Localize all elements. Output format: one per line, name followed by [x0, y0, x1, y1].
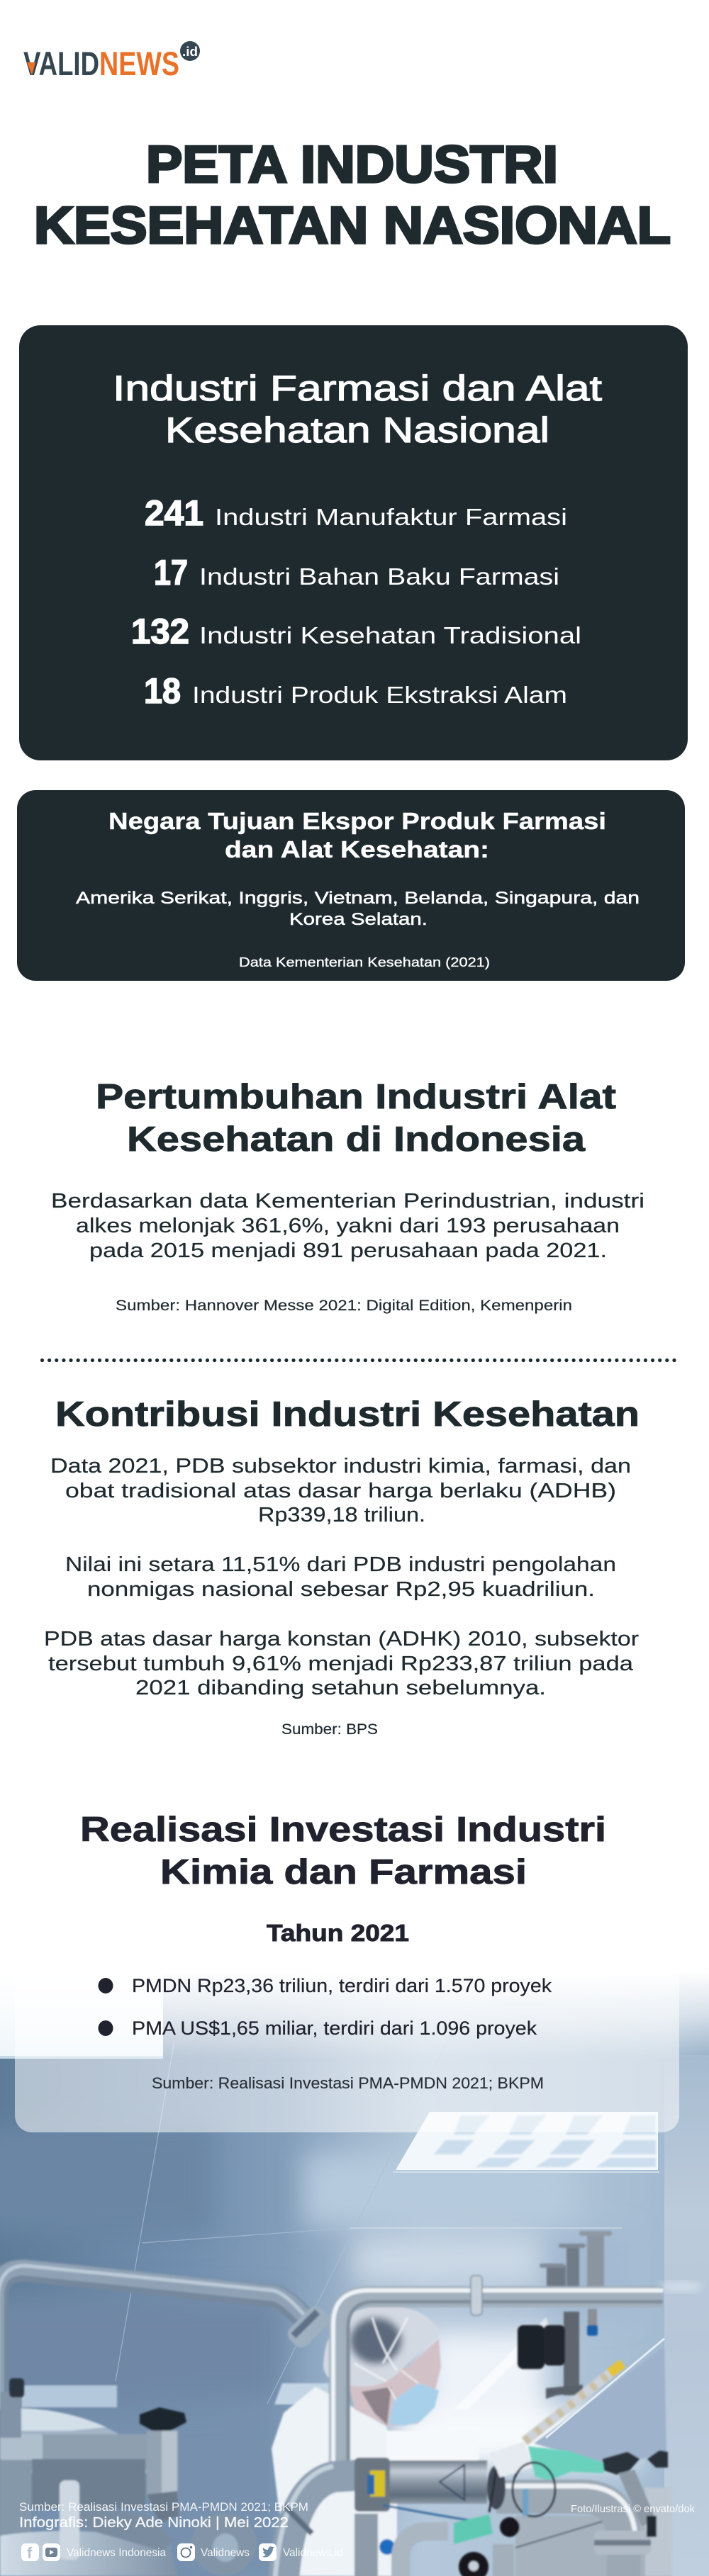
paragraph 3: tersebut tumbuh 9,61% menjadi Rp233,87 triliun pada [48, 1653, 634, 1675]
icon: facebook: f [27, 2544, 33, 2562]
export countries: Amerika Serikat, Inggris, Vietnam, Belanda, Singapura, dan [76, 889, 640, 908]
heading: Kesehatan di Indonesia [127, 1120, 586, 1159]
logo: Validnews.id: .id [182, 45, 198, 59]
diaphragm valve with black knob [518, 2309, 598, 2399]
paragraph 2: nonmigas nasional sebesar Rp2,95 kuadriliun. [87, 1578, 595, 1601]
paragraph 3 [44, 1628, 639, 1699]
source: Sumber: BPS [281, 1721, 378, 1738]
stat: 132: 132 [131, 612, 189, 651]
heading: Realisasi Investasi Industri [80, 1811, 606, 1849]
panel heading: Industri Farmasi dan Alat [113, 369, 602, 408]
glove [528, 2446, 610, 2480]
footer credits: Infografis: Dieky Ade Ninoki | Mei 2022 [19, 2515, 289, 2531]
stat: 18: 18 [144, 671, 181, 711]
export countries [76, 889, 640, 929]
paragraph 3: PDB atas dasar harga konstan (ADHK) 2010, subsektor [44, 1628, 639, 1650]
background photo: cleanroom worker and steel pipes [0, 1980, 709, 2576]
heading: Kontribusi Industri Kesehatan [55, 1395, 640, 1434]
lower arch pipes [354, 2514, 503, 2576]
paragraph 1: Rp339,18 triliun. [258, 1504, 425, 1526]
left pipe [0, 2266, 312, 2409]
stat: 241: 241 [145, 493, 203, 533]
icon: youtube [43, 2543, 60, 2561]
upper valves [540, 2231, 612, 2288]
paragraph 1: Data 2021, PDB subsektor industri kimia, farmasi, dan [50, 1455, 631, 1478]
label: Validnews.id: Validnews.id [283, 2547, 343, 2559]
stat: 18 [144, 671, 567, 711]
bullet PMA: PMA US$1,65 miliar, terdiri dari 1.096 proyek [132, 2018, 537, 2039]
stat: 132: Industri Kesehatan Tradisional [199, 622, 581, 648]
export heading: Negara Tujuan Ekspor Produk Farmasi [108, 808, 606, 834]
title [34, 136, 671, 254]
photo credit: Foto/Ilustrasi © envato/dok [571, 2503, 695, 2515]
panel: industri farmasi dan alat kesehatan [19, 325, 688, 760]
export heading [108, 808, 606, 862]
section: pertumbuhan industri alat kesehatan [51, 1078, 644, 1314]
man: hairnet [323, 2306, 439, 2387]
left pipe flange [287, 2306, 328, 2348]
icon: instagram [177, 2543, 195, 2561]
stat: 18: Industri Produk Ekstraksi Alam [192, 682, 567, 708]
stat: 17: 17 [154, 553, 188, 592]
large elbow pipe [496, 2486, 636, 2576]
export countries: Korea Selatan. [289, 910, 428, 929]
left ceiling light [0, 1978, 163, 2056]
paragraph 3: 2021 dibanding setahun sebelumnya. [135, 1677, 546, 1699]
label: Validnews Indonesia: Validnews Indonesia [67, 2547, 166, 2559]
icon: facebook [21, 2543, 39, 2562]
paragraph 2: Nilai ini setara 11,51% dari PDB industri pengolahan [65, 1553, 616, 1576]
paragraph 1: obat tradisional atas dasar harga berlaku (ADHB) [65, 1480, 616, 1502]
body text: alkes melonjak 361,6%, yakni dari 193 perusahaan [76, 1215, 620, 1237]
stat: 17 [154, 553, 559, 592]
man: head and mask [347, 2339, 441, 2426]
right-hand knobs and stem [594, 2451, 668, 2555]
export heading: dan Alat Kesehatan: [225, 836, 489, 862]
distant lights [21, 2385, 117, 2407]
curved pipe lower centre [275, 2466, 369, 2576]
export source: Data Kementerian Kesehatan (2021) [239, 955, 490, 969]
heading: Pertumbuhan Industri Alat [96, 1078, 616, 1116]
teal glove patch, blue ball, black disc [379, 2514, 520, 2555]
right pipe [333, 2290, 663, 2466]
title: PETA INDUSTRI [146, 136, 558, 193]
section: realisasi investasi [15, 1811, 679, 2132]
black star knob [459, 2552, 489, 2576]
bullet PMDN: PMDN Rp23,36 triliun, terdiri dari 1.570 proyek [132, 1975, 552, 1996]
tank valve and knob [140, 2407, 186, 2523]
paragraph 2 [65, 1553, 616, 1601]
right-hand tank [515, 2487, 672, 2576]
panel: negara tujuan ekspor [17, 790, 685, 981]
paragraph 1 [50, 1455, 631, 1526]
ceiling light fixture right [393, 2112, 659, 2172]
right wall [664, 2055, 709, 2576]
panel heading [113, 369, 602, 450]
stat: 132 [131, 612, 581, 651]
heading [96, 1078, 616, 1159]
wiring loop [383, 2463, 555, 2523]
body text: pada 2015 menjadi 891 perusahaan pada 2021. [89, 1239, 607, 1262]
logo: Validnews.id: VALID [23, 45, 99, 82]
label: Validnews: Validnews [201, 2547, 250, 2559]
heading: Kimia dan Farmasi [160, 1853, 527, 1891]
title: KESEHATAN NASIONAL [34, 197, 671, 254]
cylinder and assembly [354, 2441, 532, 2512]
far-left tank [0, 2378, 177, 2576]
heading [80, 1811, 606, 1891]
stat: 241: Industri Manufaktur Farmasi [215, 504, 567, 530]
ceiling soft shading [0, 2126, 638, 2576]
source: Sumber: Hannover Messe 2021: Digital Edition, Kemenperin [116, 1298, 572, 1314]
body text [51, 1190, 644, 1262]
panel heading: Kesehatan Nasional [165, 410, 549, 450]
logo: Validnews.id [23, 41, 200, 82]
body text: Berdasarkan data Kementerian Perindustrian, industri [51, 1190, 644, 1213]
translucent panel [15, 1885, 679, 2132]
section: kontribusi industri kesehatan [44, 1395, 640, 1738]
alcove lower wedge [534, 2346, 666, 2466]
subheading: Tahun 2021 [267, 1920, 409, 1946]
striped rod [525, 2363, 623, 2441]
logo: Validnews.id: NEWS [99, 45, 179, 82]
ceiling seams [116, 2032, 622, 2404]
pipe clamp [471, 2276, 482, 2315]
white fade into page [0, 1913, 709, 2059]
flange ring [191, 2513, 257, 2575]
footer credits [19, 2500, 308, 2531]
icon: twitter [259, 2543, 277, 2561]
man: coat [272, 2387, 397, 2576]
stat: 241 [145, 493, 567, 533]
footer credits: Sumber: Realisasi Investasi PMA-PMDN 2021; BKPM [19, 2500, 308, 2514]
source: Sumber: Realisasi Investasi PMA-PMDN 2021; BKPM [152, 2074, 544, 2092]
stat: 17: Industri Bahan Baku Farmasi [199, 563, 559, 590]
